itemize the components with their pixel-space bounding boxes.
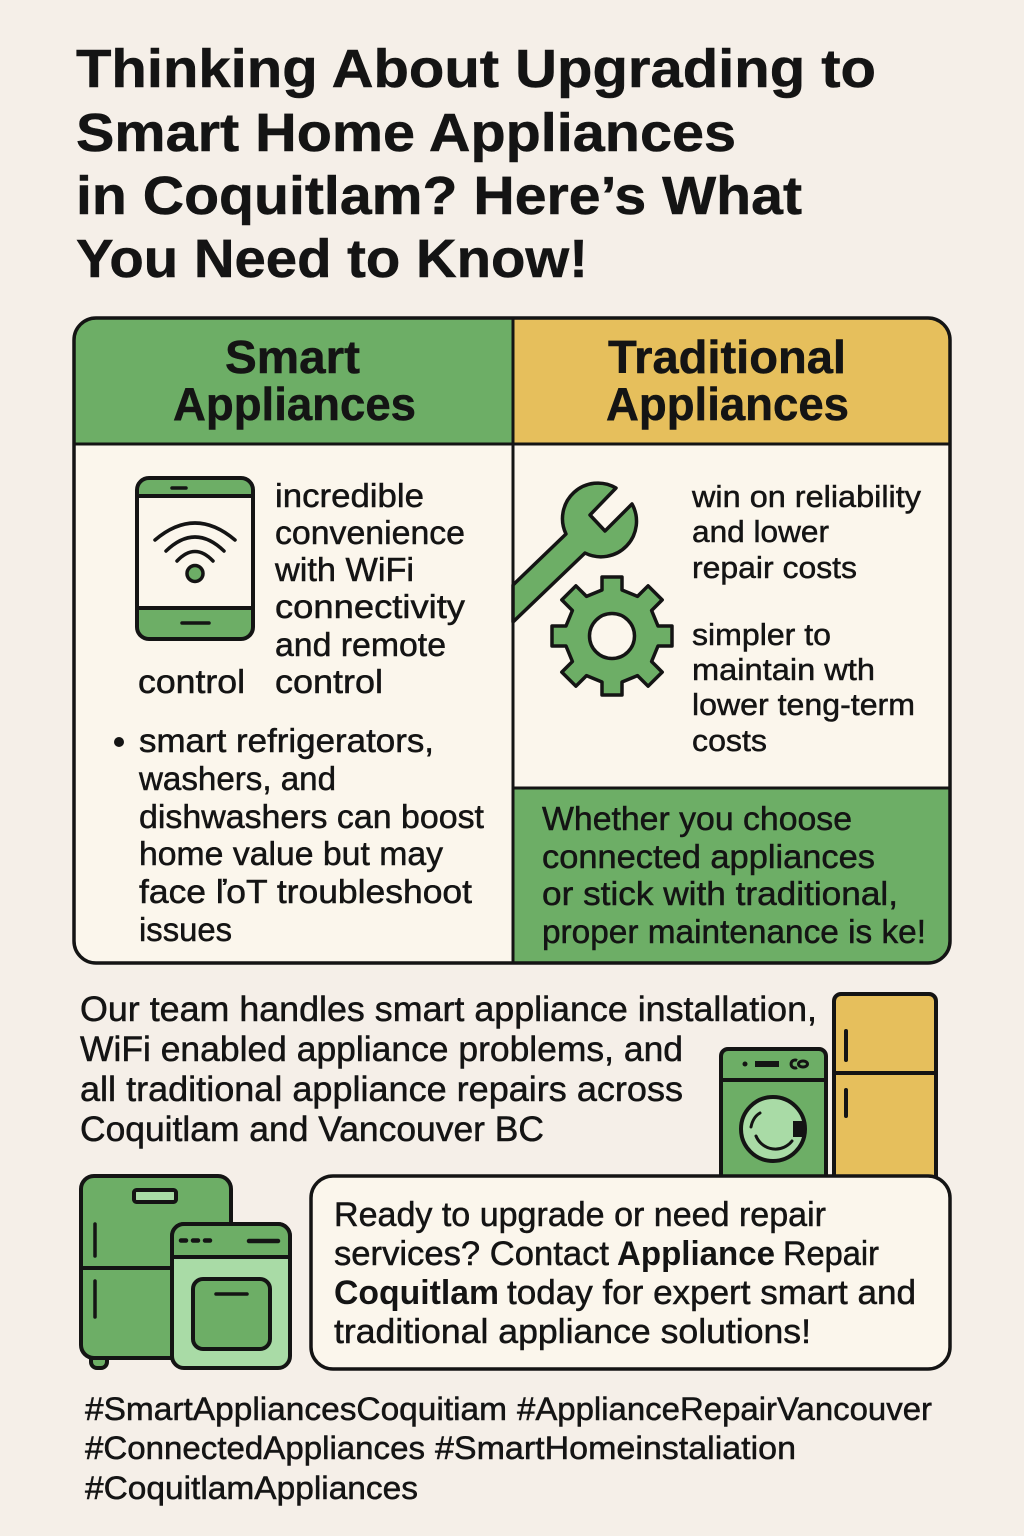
title: Thinking About Upgrading to [76,39,876,99]
panel: call to action: Repair [783,1235,879,1273]
callout: maintenance: proper maintenance is ke! [542,913,926,950]
panel: call to action: Appliance [617,1235,775,1273]
title: You Need to Know! [76,229,588,289]
text: smart bullet: smart refrigerators, [139,722,434,759]
text: traditional benefits: lower teng-term [692,687,915,722]
text: team description [80,990,817,1149]
panel: traditional appliances header [513,318,950,444]
panel: traditional appliances header: Traditional [608,331,846,383]
text: smart convenience: control [275,663,383,700]
text: smart bullet: dishwashers can boost [139,798,484,835]
text: team description: all traditional appliance repairs across [80,1070,683,1109]
text: hashtags: #CoquitlamAppliances [85,1470,418,1506]
callout: maintenance: connected appliances [542,838,875,875]
title [76,39,876,289]
panel: call to action: today for expert smart and [507,1274,916,1312]
text: smart convenience: and remote [275,626,446,663]
text: hashtags [85,1391,932,1506]
text: smart bullet: face ľoT troubleshoot [139,873,472,910]
text: hashtags: #ConnectedAppliances [85,1430,425,1466]
icon: wrench [513,483,637,622]
panel: smart appliances header: Appliances [173,378,416,430]
text: smart convenience: with WiFi [274,551,414,588]
text: traditional benefits: maintain wth [692,652,875,687]
text: team description: Coquitlam and Vancouver BC [80,1110,544,1149]
title: Smart Home Appliances [76,103,736,163]
text: traditional benefits: win on reliability [691,479,922,514]
text: smart convenience: control [138,663,245,700]
text: smart bullet: washers, and [138,760,336,797]
icon: gear [552,577,672,695]
text: smart convenience: connectivity [275,588,466,625]
panel: smart appliances header: Smart [225,331,360,383]
text: traditional benefits [691,479,922,758]
text: smart bullet: home value but may [139,835,444,872]
callout: maintenance: or stick with traditional, [542,875,898,912]
title: in Coquitlam? Here’s What [76,166,802,226]
text: traditional benefits: costs [692,723,767,758]
text: team description: WiFi enabled appliance problems, and [80,1030,683,1069]
text: smart convenience: incredible [275,477,424,514]
text: hashtags: #SmartAppliancesCoquitiam [85,1391,507,1427]
panel: call to action: Ready to upgrade or need repair [334,1196,826,1234]
panel: smart appliances header [74,318,513,444]
panel: comparison table [74,318,950,963]
panel: call to action: traditional appliance solutions! [334,1313,811,1351]
text: traditional benefits: simpler to [692,617,831,652]
icon: yellow refrigerator [834,994,936,1178]
panel: call to action: services? Contact [334,1235,610,1273]
text: smart convenience [138,477,466,700]
text: hashtags: #SmartHomeinstaliation [435,1430,796,1466]
panel: call to action: Coquitlam [334,1274,499,1312]
text: smart bullet [114,722,484,948]
text: smart bullet: issues [139,911,232,948]
panel: traditional appliances header: Appliances [606,378,849,430]
text: team description: Our team handles smart appliance installation, [80,990,817,1029]
callout: maintenance: Whether you choose [542,800,852,837]
callout: maintenance [513,788,950,963]
icon: washing machine [721,1049,826,1178]
icon: green refrigerator and oven [81,1176,290,1368]
icon: phone with wifi [137,478,253,639]
text: smart convenience: convenience [275,514,465,551]
text: traditional benefits: and lower [692,514,829,549]
text: traditional benefits: repair costs [692,550,857,585]
panel: call to action [311,1176,950,1369]
text: hashtags: #ApplianceRepairVancouver [517,1391,932,1427]
